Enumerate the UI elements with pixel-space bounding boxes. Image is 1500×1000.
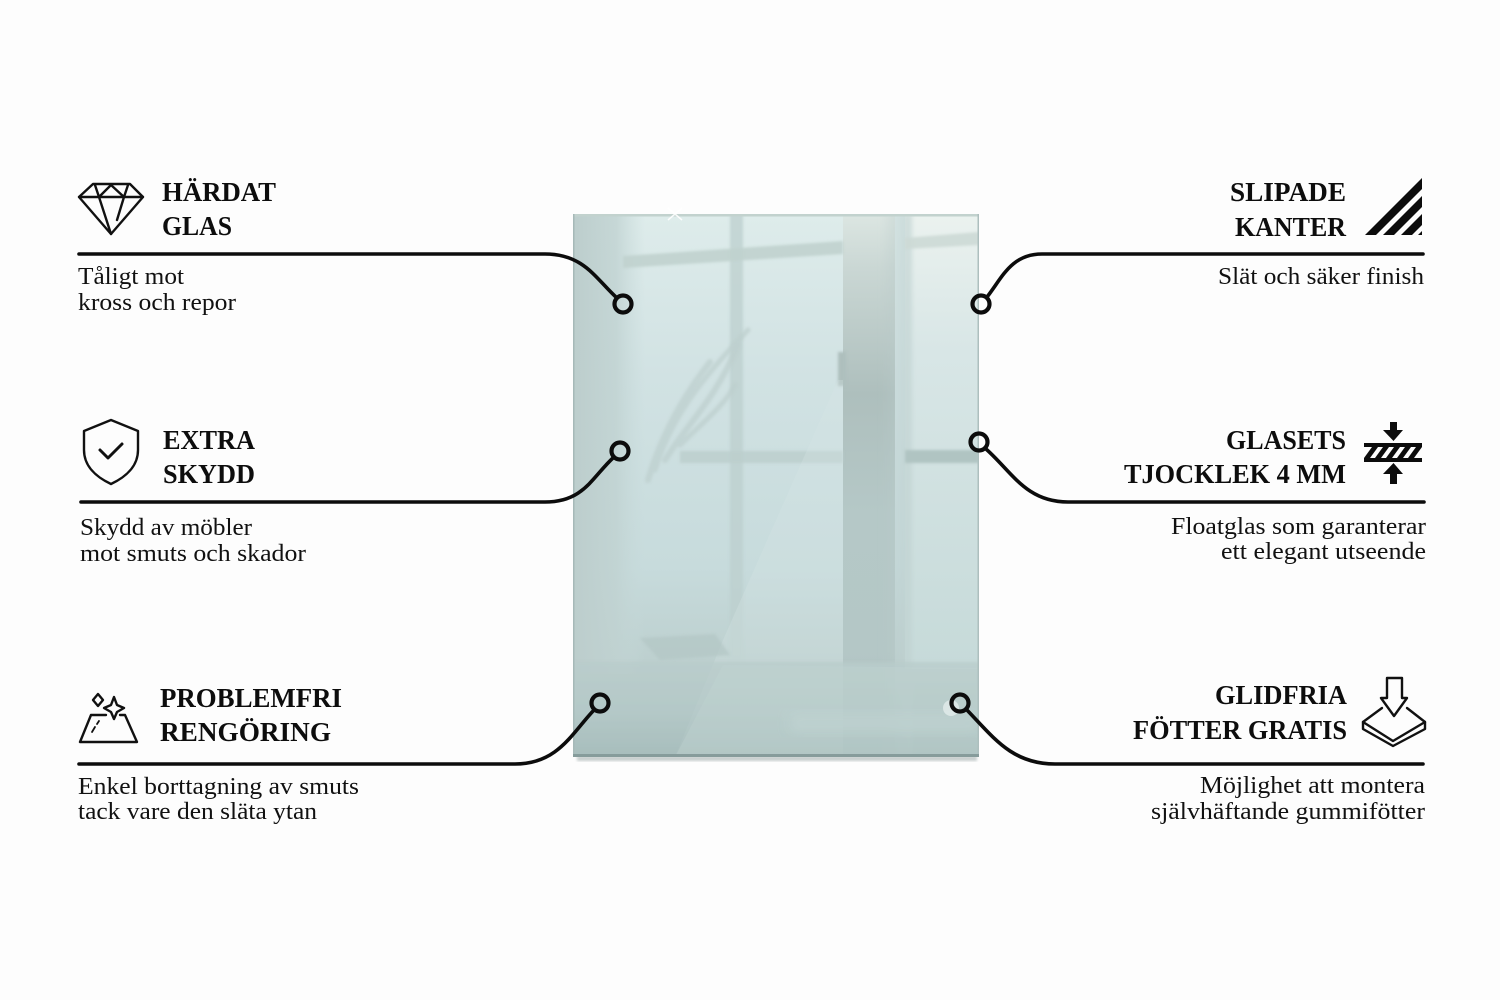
text: tåligt mot: kross och repor (78, 290, 236, 316)
text: floatglas: ett elegant utseende (1221, 539, 1426, 565)
text: enkel borttagning: Enkel borttagning av smuts (78, 774, 359, 800)
heading: glidfria fötter (1133, 680, 1347, 745)
heading: glasets tjocklek: TJOCKLEK 4 MM (1124, 459, 1346, 489)
heading: extra skydd (163, 425, 255, 489)
heading: glidfria fötter: FÖTTER GRATIS (1133, 715, 1347, 745)
connector: extra skydd (81, 442, 628, 502)
heading: problemfri rengöring: RENGÖRING (160, 717, 331, 747)
connector: slipade kanter (972, 254, 1423, 312)
icon: ground edges (1365, 178, 1422, 235)
text: slät och säker finish: Slät och säker finish (1218, 264, 1424, 290)
text: möjlighet att montera (1151, 773, 1425, 825)
heading: glidfria fötter: GLIDFRIA (1215, 680, 1347, 710)
heading: slipade kanter: KANTER (1235, 212, 1346, 242)
icon: adhesive feet (1363, 678, 1425, 746)
text: skydd av möbler (80, 515, 306, 567)
connector: härdat glas (79, 254, 632, 312)
heading: slipade kanter (1230, 177, 1346, 242)
icon: thickness (1364, 422, 1422, 484)
text: skydd av möbler: Skydd av möbler (80, 515, 252, 541)
text: möjlighet att montera: Möjlighet att montera (1200, 773, 1425, 799)
connector: glidfria fötter (952, 694, 1423, 764)
heading: härdat glas: GLAS (162, 211, 232, 241)
icon: diamond (79, 184, 143, 234)
heading: extra skydd: SKYDD (163, 459, 255, 489)
glass panel (573, 208, 979, 761)
heading: härdat glas: HÄRDAT (162, 177, 276, 207)
text: enkel borttagning (78, 774, 359, 825)
heading: problemfri rengöring (160, 683, 342, 747)
heading: härdat glas (162, 177, 276, 241)
text: enkel borttagning: tack vare den släta ytan (78, 799, 317, 825)
heading: extra skydd: EXTRA (163, 425, 255, 455)
text: tåligt mot: Tåligt mot (78, 264, 184, 290)
connector: problemfri rengöring (79, 694, 608, 764)
icon: sparkling glass (80, 694, 137, 742)
text: tåligt mot (78, 264, 236, 316)
heading: problemfri rengöring: PROBLEMFRI (160, 683, 342, 713)
text: floatglas: Floatglas som garanterar (1171, 514, 1426, 540)
heading: glasets tjocklek (1124, 425, 1346, 489)
text: möjlighet att montera: självhäftande gummifötter (1151, 799, 1425, 825)
text: skydd av möbler: mot smuts och skador (80, 541, 306, 567)
heading: glasets tjocklek: GLASETS (1226, 425, 1346, 455)
text: floatglas (1171, 514, 1426, 565)
connector: glasets tjocklek (970, 434, 1424, 502)
icon: shield with check (84, 420, 138, 484)
heading: slipade kanter: SLIPADE (1230, 177, 1346, 207)
